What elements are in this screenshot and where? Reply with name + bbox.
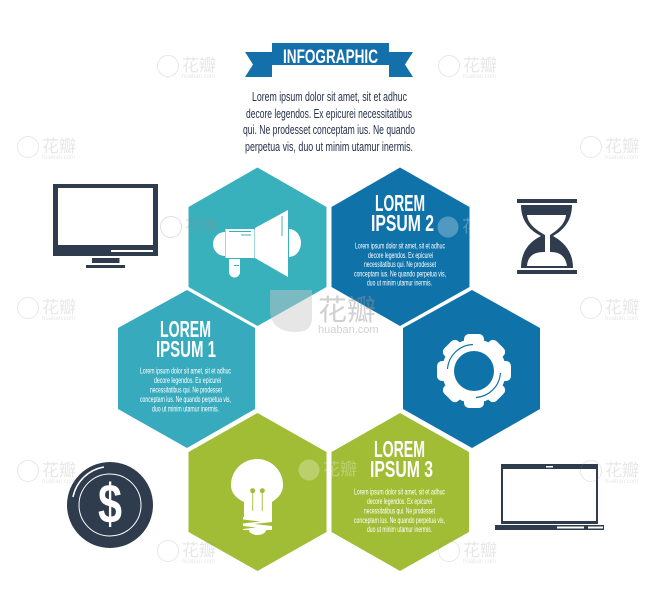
banner ribbon: INFOGRAPHIC xyxy=(283,46,378,68)
watermark: repeated huaban marks: huaban.com xyxy=(463,559,496,565)
watermark: repeated huaban marks: 花瓣 xyxy=(605,461,639,480)
watermark: repeated huaban marks: 花瓣 xyxy=(463,56,497,75)
watermark: repeated huaban marks: huaban.com xyxy=(42,316,75,322)
watermark: repeated huaban marks: 花瓣 xyxy=(42,137,76,156)
watermark: huaban centre: huaban.com xyxy=(318,324,379,336)
hexagon: lorem ipsum 2: decore legendos. Ex epicurei xyxy=(368,251,433,260)
hexagon: gear xyxy=(403,290,540,448)
watermark: huaban centre: 花瓣 xyxy=(318,294,376,327)
watermark: repeated huaban marks: 花瓣 xyxy=(182,541,216,560)
hexagon: lorem ipsum 1: IPSUM 1 xyxy=(156,336,216,362)
watermark: repeated huaban marks: huaban.com xyxy=(42,155,75,161)
hexagon: lorem ipsum 2: conceptam ius. Ne quando perpetua vis, xyxy=(354,270,446,278)
watermark: marks over hexagons xyxy=(160,216,496,480)
hexagon: lorem ipsum 2: LOREM xyxy=(375,190,425,216)
hexagon: megaphone xyxy=(188,168,326,326)
intro text block: Lorem ipsum dolor sit amet, sit et adhuc xyxy=(252,89,407,104)
icon: laptop xyxy=(495,464,604,530)
icon: gear xyxy=(437,334,511,408)
watermark: repeated huaban marks: huaban.com xyxy=(605,316,638,322)
icon: dollar coin: $ xyxy=(98,472,122,535)
hexagon: lorem ipsum 2: IPSUM 2 xyxy=(371,210,434,236)
hexagon: lorem ipsum 1: necessitatibus qui. Ne prodesset xyxy=(150,386,223,394)
hexagon: lorem ipsum 3: conceptam ius. Ne quando perpetua vis, xyxy=(354,516,445,525)
watermark: repeated huaban marks xyxy=(18,56,639,565)
watermark: repeated huaban marks: 花瓣 xyxy=(463,541,497,560)
watermark: repeated huaban marks: huaban.com xyxy=(182,74,215,80)
icon: dollar coin xyxy=(67,462,153,548)
hexagon: lorem ipsum 3: decore legendos. Ex epicurei xyxy=(367,497,432,506)
hexagon: lorem ipsum 3: Lorem ipsum dolor sit amet, sit et adhuc xyxy=(354,488,445,496)
watermark: repeated huaban marks: huaban.com xyxy=(605,155,638,161)
hexagon: lorem ipsum 3 xyxy=(332,413,469,571)
hexagon: lorem ipsum 3: duo ut minim utamur inermis. xyxy=(367,525,432,534)
watermark: repeated huaban marks: huaban.com xyxy=(605,479,638,485)
hexagon: lorem ipsum 1: conceptam ius. Ne quando perpetua vis, xyxy=(140,395,231,404)
hexagon: lorem ipsum 2: Lorem ipsum dolor sit amet, sit et adhuc xyxy=(355,242,445,250)
icon: light bulb xyxy=(231,459,283,535)
hexagon: lorem ipsum 1: decore legendos. Ex epicurei xyxy=(154,376,221,385)
watermark: repeated huaban marks: 花瓣 xyxy=(605,137,639,156)
watermark: repeated huaban marks: 花瓣 xyxy=(182,56,216,75)
watermark: repeated huaban marks: 花瓣 xyxy=(42,461,76,480)
hexagon: lorem ipsum 3: LOREM xyxy=(374,436,425,462)
intro text block: perpetua vis, duo ut minim utamur inermis. xyxy=(245,139,413,154)
hexagon: lorem ipsum 1: LOREM xyxy=(160,316,211,342)
watermark: marks over hexagons: 花瓣 xyxy=(323,460,357,479)
hexagon: lorem ipsum 2: duo ut minim utamur inermis. xyxy=(367,278,432,288)
hexagon: lorem ipsum 3: necessitatibus qui. Ne prodesset xyxy=(364,506,436,516)
watermark: repeated huaban marks: huaban.com xyxy=(182,559,215,565)
intro text block: qui. Ne prodesset conceptam ius. Ne quando xyxy=(243,122,415,137)
hexagon: lorem ipsum 3: IPSUM 3 xyxy=(370,456,433,482)
hexagon: lorem ipsum 1: Lorem ipsum dolor sit amet, sit et adhuc xyxy=(140,366,231,376)
hexagon: lorem ipsum 2 xyxy=(332,168,470,326)
hexagon: lorem ipsum 1: duo ut minim utamur inermis. xyxy=(152,404,219,414)
banner ribbon xyxy=(245,43,413,77)
hexagon: light bulb xyxy=(188,413,326,571)
watermark: repeated huaban marks: 花瓣 xyxy=(605,298,639,317)
icon: megaphone xyxy=(213,210,301,278)
intro text block: decore legendos. Ex epicurei necessitatibus xyxy=(246,106,412,121)
watermark: repeated huaban marks: 花瓣 xyxy=(42,298,76,317)
watermark: marks over hexagons: 花瓣 xyxy=(462,217,496,236)
icon: hourglass xyxy=(517,199,577,274)
watermark: huaban centre xyxy=(270,290,379,336)
watermark: marks over hexagons: 花瓣 xyxy=(185,217,219,236)
watermark: repeated huaban marks: huaban.com xyxy=(463,74,496,80)
intro text block xyxy=(243,89,415,154)
hexagon: lorem ipsum 1 xyxy=(118,290,255,448)
icon: desktop monitor xyxy=(53,184,158,268)
hexagon: lorem ipsum 2: necessitatibus qui. Ne prodesset xyxy=(364,260,437,269)
watermark: repeated huaban marks: huaban.com xyxy=(42,479,75,485)
